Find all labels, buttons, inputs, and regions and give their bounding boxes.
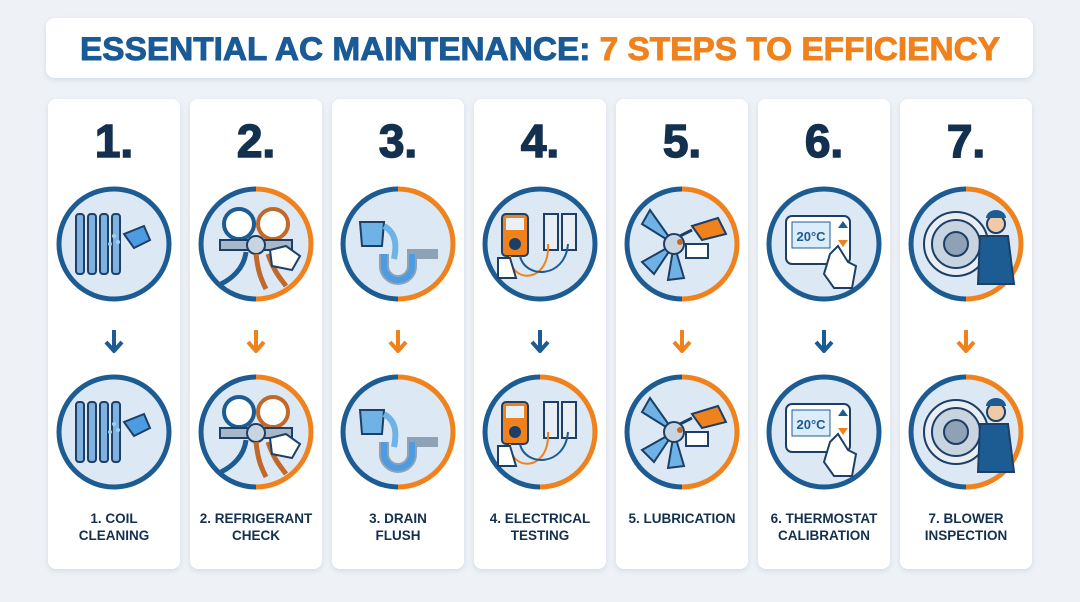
icon: drain top (343, 189, 453, 299)
number 4: 4. (521, 115, 559, 167)
label: CLEANING (79, 528, 149, 543)
icon: blower top (911, 189, 1021, 299)
arrow (390, 330, 406, 351)
title: ESSENTIAL AC MAINTENANCE: 7 STEPS TO EFFICIENCY (80, 31, 1000, 67)
icon: gauges bottom (201, 377, 311, 487)
arrow (106, 330, 122, 351)
arrow (958, 330, 974, 351)
icon: multimeter top (485, 189, 595, 299)
icon: blower bottom (911, 377, 1021, 487)
label: 4. ELECTRICAL (490, 511, 590, 526)
label: INSPECTION (925, 528, 1007, 543)
number 3: 3. (379, 115, 417, 167)
title (46, 18, 1033, 78)
label: FLUSH (376, 528, 420, 543)
icon: fan oil bottom (627, 377, 737, 487)
icon: multimeter bottom (485, 377, 595, 487)
icon: fan oil top (627, 189, 737, 299)
icon: coil cleaning top (59, 189, 169, 299)
panel: step 1 coil cleaning (48, 99, 180, 569)
icon: coil cleaning bottom (59, 377, 169, 487)
arrow (532, 330, 548, 351)
icon: drain bottom (343, 377, 453, 487)
label: 2. REFRIGERANT (200, 511, 313, 526)
arrow (674, 330, 690, 351)
label: 6. THERMOSTAT (771, 511, 878, 526)
icon: thermostat top (769, 189, 879, 299)
number 7: 7. (947, 115, 985, 167)
number 2: 2. (237, 115, 275, 167)
label: 1. COIL (90, 511, 138, 526)
label: 7. BLOWER (928, 511, 1004, 526)
label: CHECK (232, 528, 280, 543)
label: TESTING (511, 528, 569, 543)
label: 5. LUBRICATION (628, 511, 736, 526)
panel: step 5 lubrication (616, 99, 748, 569)
panel: step 4 electrical testing (474, 99, 606, 569)
panel: step 6 thermostat calibration (758, 99, 890, 569)
icon: thermostat bottom (769, 377, 879, 487)
panel: step 3 drain flush (332, 99, 464, 569)
label: CALIBRATION (778, 528, 870, 543)
number 5: 5. (663, 115, 701, 167)
label: 3. DRAIN (369, 511, 427, 526)
arrow (248, 330, 264, 351)
panel: step 2 refrigerant check (190, 99, 322, 569)
panel: step 7 blower inspection (900, 99, 1032, 569)
number 6: 6. (805, 115, 843, 167)
arrow (816, 330, 832, 351)
number 1: 1. (95, 115, 133, 167)
icon: gauges top (201, 189, 311, 299)
